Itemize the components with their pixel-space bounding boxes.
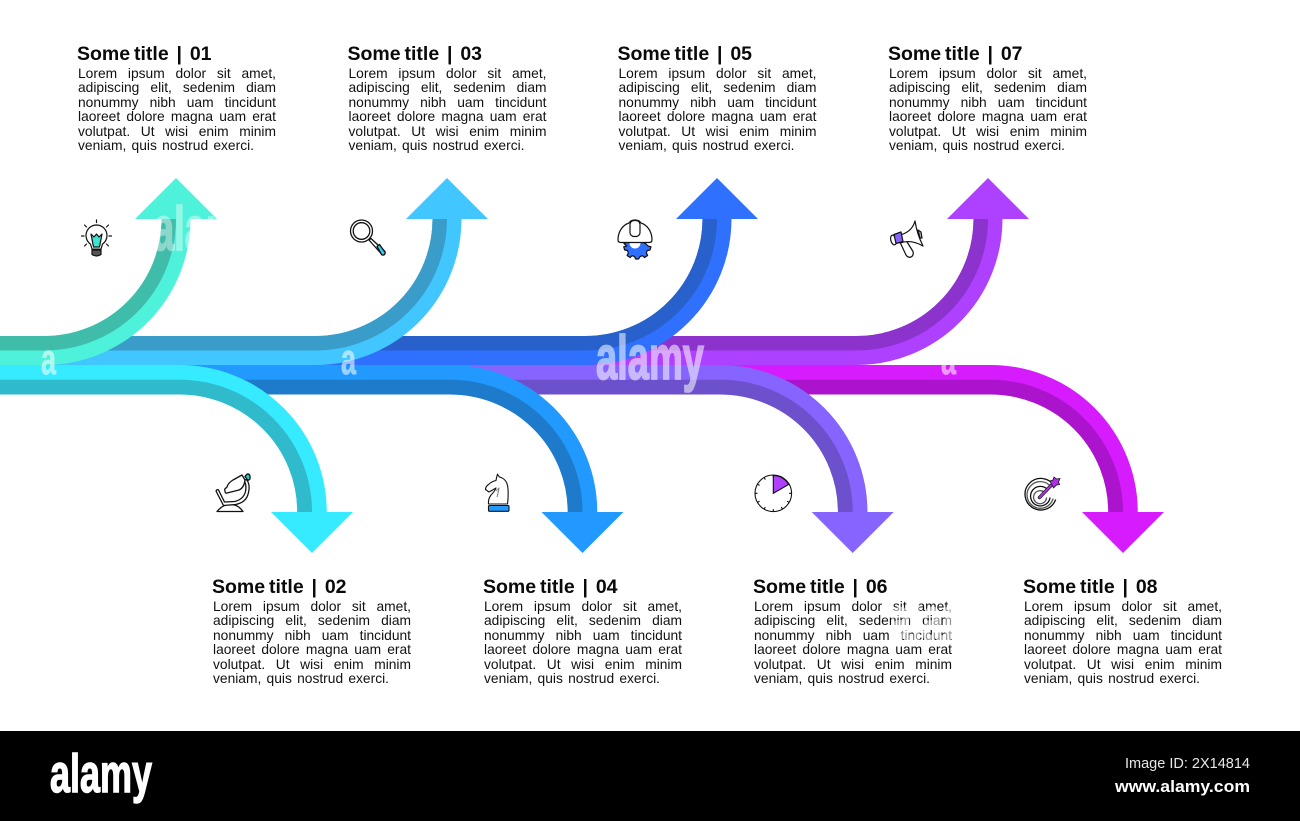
body 07: Lorem ipsum dolor sit amet, (889, 66, 1087, 80)
heading 04: Some title | 04 (483, 576, 618, 598)
watermark: center: alamy (596, 324, 704, 393)
body 05: veniam, quis nostrud exerci. (618, 138, 794, 153)
heading 06: Some title | 06 (753, 576, 888, 598)
body 03: Lorem ipsum dolor sit amet, (348, 66, 546, 80)
text block 02 (212, 576, 411, 686)
body 02 (213, 598, 411, 686)
body 04: Lorem ipsum dolor sit amet, (484, 598, 682, 614)
text block 01 (77, 43, 276, 153)
body 06: Lorem ipsum dolor sit amet, (754, 598, 952, 614)
body 05: nonummy nibh uam tincidunt (618, 94, 816, 110)
body 02: Lorem ipsum dolor sit amet, (213, 598, 411, 614)
heading 08: Some title | 08 (1023, 576, 1158, 598)
body 06: volutpat. Ut wisi enim minim (754, 656, 952, 672)
body 01 (78, 66, 276, 153)
body 08: nonummy nibh uam tincidunt (1024, 628, 1222, 642)
body 02: laoreet dolore magna uam erat (213, 642, 411, 657)
body 01: Lorem ipsum dolor sit amet, (78, 66, 276, 80)
footer image id: Image ID: 2X14814 (1125, 755, 1250, 772)
arrow 02 (0, 380, 353, 553)
text block 08 (1023, 576, 1222, 686)
icon: helmet and gear (618, 220, 652, 259)
heading 02: Some title | 02 (212, 576, 347, 598)
body 08 (1024, 598, 1222, 686)
arrow 08 (0, 380, 1164, 553)
text block 04 (483, 576, 682, 686)
body 07: veniam, quis nostrud exerci. (889, 138, 1065, 153)
body 04: veniam, quis nostrud exerci. (484, 671, 660, 686)
body 03: volutpat. Ut wisi enim minim (348, 124, 546, 138)
body 06: laoreet dolore magna uam erat (754, 642, 952, 657)
text block 05 (618, 43, 816, 153)
watermark ghost over text 06: alamy (890, 586, 998, 655)
body 04 (484, 598, 682, 686)
body 03 (348, 66, 546, 153)
text block 06 (753, 576, 952, 686)
text block 07 (888, 43, 1087, 153)
arrow 03 (0, 178, 488, 350)
body 04: volutpat. Ut wisi enim minim (484, 656, 682, 672)
text block 03 (348, 43, 546, 153)
body 05 (618, 66, 816, 153)
body 02: adipiscing elit, sedenim diam (213, 613, 411, 628)
body 04: nonummy nibh uam tincidunt (484, 628, 682, 642)
icon: clock (755, 475, 792, 512)
arrow 06 (0, 380, 894, 553)
watermark: second a: a (341, 335, 356, 384)
body 01: volutpat. Ut wisi enim minim (78, 124, 276, 138)
body 06 (754, 598, 952, 686)
body 05: volutpat. Ut wisi enim minim (618, 124, 816, 138)
body 03: veniam, quis nostrud exerci. (348, 138, 524, 153)
body 08: laoreet dolore magna uam erat (1024, 642, 1222, 657)
body 08: adipiscing elit, sedenim diam (1024, 613, 1222, 628)
heading 07: Some title | 07 (888, 43, 1023, 65)
body 06: nonummy nibh uam tincidunt (754, 628, 952, 642)
icon: megaphone (890, 221, 923, 257)
body 07: volutpat. Ut wisi enim minim (889, 124, 1087, 138)
body 04: adipiscing elit, sedenim diam (484, 613, 682, 628)
icon: light bulb (82, 220, 112, 256)
icon: magnifier (350, 220, 385, 255)
body 04: laoreet dolore magna uam erat (484, 642, 682, 657)
body 06: veniam, quis nostrud exerci. (754, 671, 930, 686)
heading 05: Some title | 05 (618, 43, 752, 65)
body 07: adipiscing elit, sedenim diam (889, 80, 1087, 95)
body 03: adipiscing elit, sedenim diam (348, 80, 546, 95)
arrow 01 (0, 178, 217, 350)
body 03: nonummy nibh uam tincidunt (348, 94, 546, 110)
watermark: arrow 01: alamy (153, 195, 261, 264)
body 01: veniam, quis nostrud exerci. (78, 138, 254, 153)
footer bar (0, 731, 1300, 821)
icon: chess knight (486, 474, 509, 511)
arrow 04 (0, 380, 624, 553)
heading 03: Some title | 03 (348, 43, 482, 65)
icon: target with dart (1025, 477, 1060, 510)
body 05: adipiscing elit, sedenim diam (618, 80, 816, 95)
body 08: volutpat. Ut wisi enim minim (1024, 656, 1222, 672)
icon: microscope (216, 474, 250, 512)
arrow 05 (0, 178, 758, 350)
body 05: Lorem ipsum dolor sit amet, (618, 66, 816, 80)
body 07: laoreet dolore magna uam erat (889, 109, 1087, 124)
body 07: nonummy nibh uam tincidunt (889, 94, 1087, 110)
body 05: laoreet dolore magna uam erat (618, 109, 816, 124)
arrows and icons artwork (0, 178, 1300, 821)
body 01: laoreet dolore magna uam erat (78, 109, 276, 124)
heading 01: Some title | 01 (77, 43, 212, 65)
body 07 (889, 66, 1087, 153)
body 01: nonummy nibh uam tincidunt (78, 94, 276, 110)
body 03: laoreet dolore magna uam erat (348, 109, 546, 124)
footer logo: alamy (50, 744, 152, 804)
arrow 07 (0, 178, 1029, 350)
body 02: nonummy nibh uam tincidunt (213, 628, 411, 642)
body 02: veniam, quis nostrud exerci. (213, 671, 389, 686)
body 01: adipiscing elit, sedenim diam (78, 80, 276, 95)
body 08: Lorem ipsum dolor sit amet, (1024, 598, 1222, 614)
footer url: www.alamy.com (1114, 777, 1250, 796)
body 06: adipiscing elit, sedenim diam (754, 613, 952, 628)
body 08: veniam, quis nostrud exerci. (1024, 671, 1200, 686)
watermark: left a: a (41, 335, 56, 384)
body 02: volutpat. Ut wisi enim minim (213, 656, 411, 672)
watermark: third a: a (941, 335, 956, 384)
